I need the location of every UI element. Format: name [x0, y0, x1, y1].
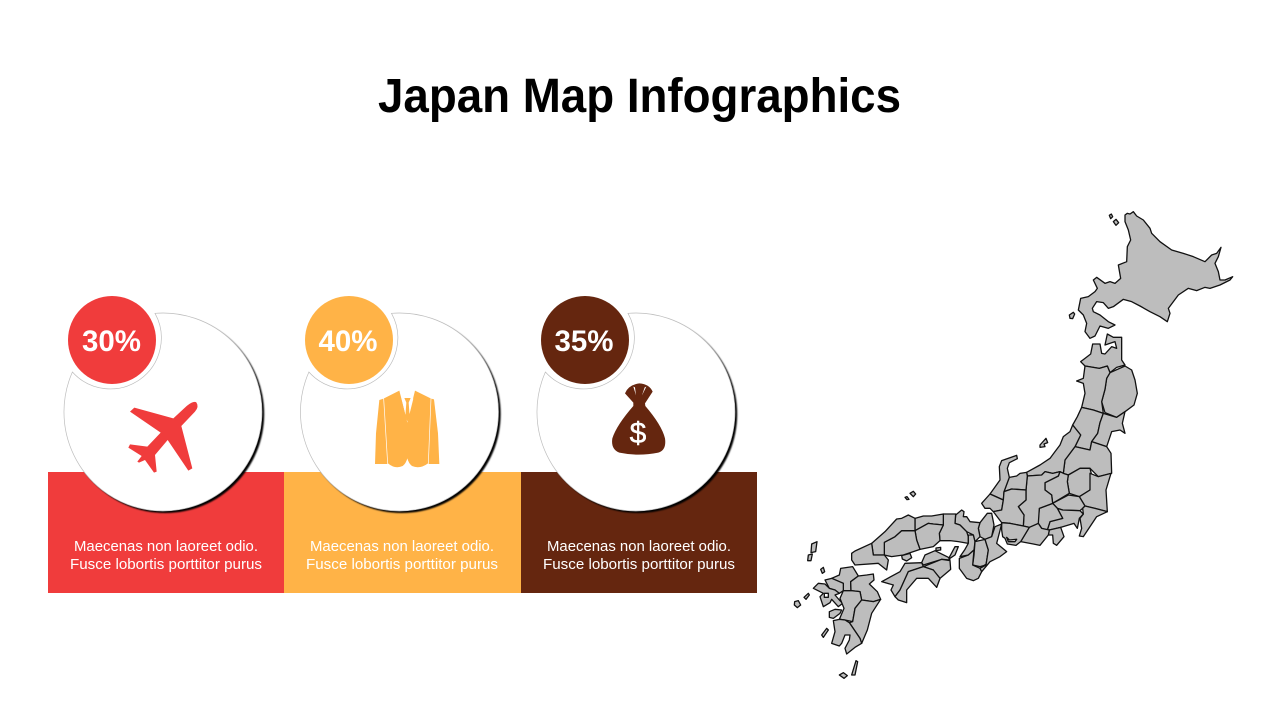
caption: orange: Fusce lobortis porttitor purus	[306, 557, 498, 573]
caption: red: Fusce lobortis porttitor purus	[70, 557, 262, 573]
caption: red: Maecenas non laoreet odio.	[74, 539, 258, 555]
badge: 40%: 40%	[318, 325, 378, 358]
badge: 30%	[68, 296, 156, 384]
caption: brown: Maecenas non laoreet odio.	[547, 539, 731, 555]
map of Japan	[794, 212, 1233, 678]
map: Chugoku	[852, 515, 920, 570]
map: Hokkaido	[1069, 212, 1233, 338]
panel: orange bar	[284, 472, 521, 593]
map: Chubu and Kanto	[982, 425, 1112, 545]
caption: brown: Fusce lobortis porttitor purus	[543, 557, 735, 573]
circle card: 35%	[534, 289, 737, 513]
badge: 35%: 35%	[554, 325, 614, 358]
map: Tohoku	[1073, 334, 1137, 450]
map: Kyushu	[794, 567, 881, 678]
badge: 35%	[541, 296, 629, 384]
badge: 30%: 30%	[82, 325, 141, 358]
circle card: 30%	[61, 289, 264, 513]
badge: 40%	[305, 296, 393, 384]
title: Japan Map Infographics	[378, 70, 901, 123]
map: Kansai	[905, 491, 1007, 581]
circle card: 40%	[298, 289, 501, 513]
map: Tsushima	[808, 542, 817, 561]
map: Shikoku	[882, 551, 951, 603]
icon: airplane	[128, 402, 198, 473]
icon: money bag: $	[630, 417, 647, 450]
icon: money bag	[612, 383, 665, 455]
caption: orange: Maecenas non laoreet odio.	[310, 539, 494, 555]
icon: suit jacket	[375, 391, 439, 467]
panel: red bar	[48, 472, 284, 593]
panel: brown bar	[521, 472, 757, 593]
